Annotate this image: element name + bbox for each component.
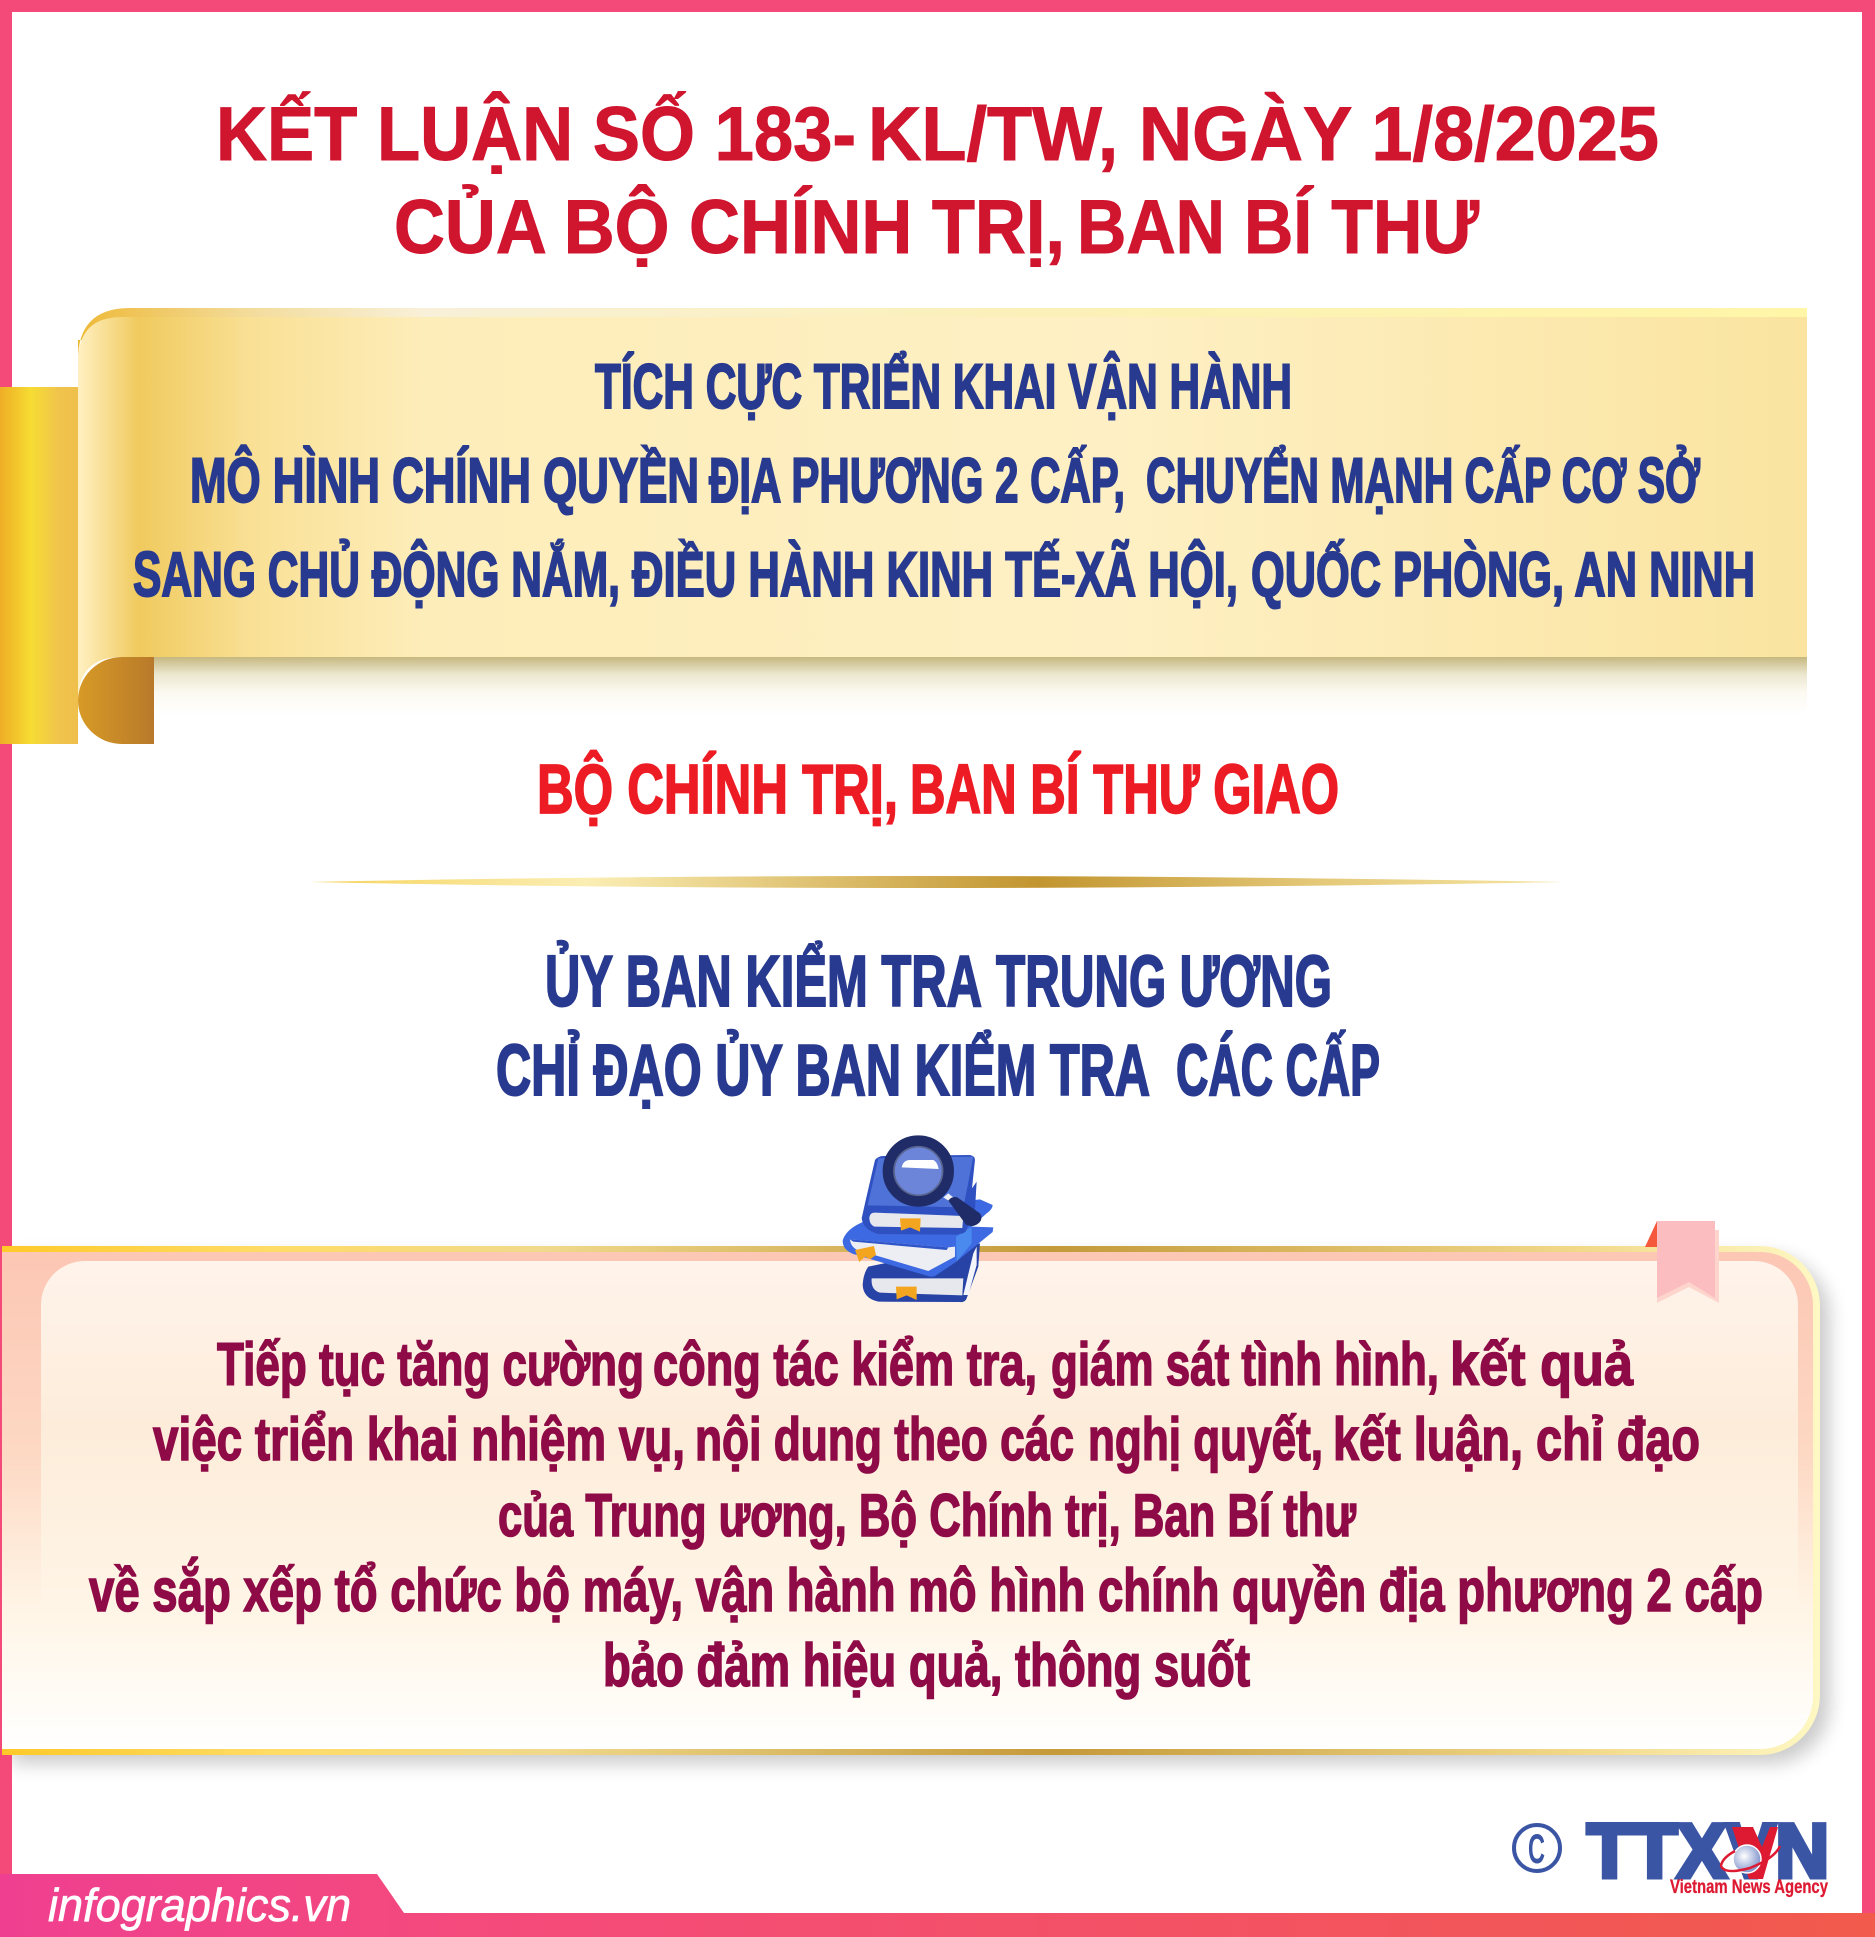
banner text: ĐIỀU HÀNH KINH TẾ-XÃ HỘI,: [632, 539, 1238, 610]
ribbon body: [78, 317, 1807, 701]
ribbon shadow: [154, 657, 1807, 715]
icon: books with magnifier: [843, 1141, 993, 1302]
globe: [1733, 1845, 1761, 1873]
panel text: [89, 1331, 1763, 1699]
ribbon back strip: [0, 387, 78, 744]
site name: infographics.vn: [48, 1879, 351, 1931]
panel text: Tiếp tục tăng cường: [217, 1331, 644, 1398]
copyright mark: [1514, 1825, 1560, 1872]
copyright mark: C: [1528, 1825, 1545, 1872]
banner text: SANG CHỦ ĐỘNG NẮM,: [133, 539, 620, 610]
section heading blue: [496, 941, 1380, 1111]
panel text: kết quả: [1450, 1331, 1634, 1398]
bookmark: [1645, 1221, 1719, 1303]
panel text: công tác kiểm tra,: [653, 1331, 1037, 1398]
section heading blue: CHỈ ĐẠO ỦY BAN KIỂM TRA: [496, 1030, 1150, 1111]
footer tab: [0, 1874, 1875, 1937]
banner text: TÍCH CỰC TRIỂN KHAI VẬN HÀNH: [595, 351, 1292, 422]
magnifier: [889, 1141, 981, 1226]
panel text: kết luận, chỉ đạo: [1333, 1406, 1700, 1473]
ribbon banner: [0, 308, 1807, 744]
middle book: [843, 1199, 993, 1277]
ribbon top edge: [78, 308, 1807, 360]
section heading red: BỘ CHÍNH TRỊ,: [537, 749, 898, 828]
ribbon curl: [78, 657, 154, 744]
section heading red: [537, 749, 1339, 828]
panel text: bảo đảm hiệu quả, thông suốt: [603, 1632, 1250, 1699]
panel pink band: [2, 1252, 1813, 1749]
section heading blue: CÁC CẤP: [1176, 1030, 1380, 1111]
banner text: MÔ HÌNH CHÍNH QUYỀN: [190, 445, 699, 516]
content panel: [2, 1221, 1820, 1755]
panel text: nội dung theo các: [695, 1406, 1074, 1473]
title: [216, 91, 1659, 270]
top book: [862, 1155, 977, 1235]
section heading red: BAN BÍ THƯ GIAO: [910, 750, 1339, 828]
banner text: ĐỊA PHƯƠNG 2 CẤP,: [709, 445, 1125, 516]
orbit: [1721, 1846, 1780, 1871]
title: BAN BÍ THƯ: [1077, 185, 1480, 270]
panel fill: [41, 1261, 1798, 1749]
red V: [1732, 1827, 1778, 1879]
title: KL/TW, NGÀY 1/8/2025: [868, 92, 1659, 177]
title: CỦA BỘ CHÍNH TRỊ,: [394, 185, 1065, 270]
section heading blue: ỦY BAN KIỂM TRA: [545, 941, 982, 1022]
agency name: Vietnam News Agency: [1670, 1877, 1828, 1898]
panel text: của Trung ương, Bộ Chính trị, Ban Bí thư: [498, 1482, 1356, 1549]
banner text: [133, 351, 1755, 610]
panel text: giám sát tình hình,: [1051, 1331, 1439, 1398]
bottom book: [863, 1243, 980, 1302]
title: KẾT LUẬN SỐ 183-: [216, 91, 856, 177]
panel gold edge: [2, 1246, 1820, 1755]
panel text: nghị quyết,: [1088, 1406, 1323, 1473]
panel text: việc triển khai nhiệm vụ,: [153, 1406, 685, 1473]
logo: TTXVN: TTXVN: [1587, 1809, 1829, 1894]
section heading blue: TRUNG ƯƠNG: [996, 942, 1332, 1022]
